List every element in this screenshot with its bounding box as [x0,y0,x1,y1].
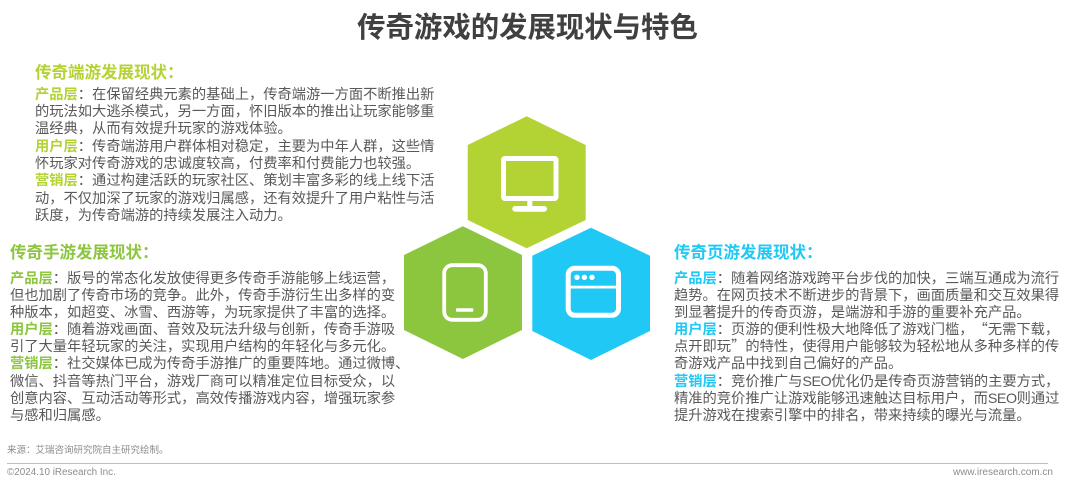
text block: mobile game details: 与感和归属感。 [10,408,110,424]
text block: PC game details: 怀玩家对传奇游戏的忠诚度较高，付费率和付费能力也较强。 [35,156,420,172]
text block: PC game details: 跃度，为传奇端游的持续发展注入动力。 [35,208,292,224]
text block: PC game details: 营销层：通过构建活跃的玩家社区、策划丰富多彩的线上线下活 [35,173,434,189]
text block: mobile game details: 微信、抖音等热门平台，游戏厂商可以精准定位目标受众，以 [10,374,395,390]
heading: PC game: 传奇端游发展现状： [35,64,184,82]
website: www.iresearch.com.cn [953,467,1053,478]
text block: mobile game details: 产品层：版号的常态化发放使得更多传奇手游能够上线运营， [10,271,395,287]
icon: monitor hexagon [468,116,586,248]
text block: PC game details: 用户层：传奇端游用户群体相对稳定，主要为中年人群，这些情 [35,139,434,155]
text block: mobile game details: 用户层：随着游戏画面、音效及玩法升级与创新，传奇手游吸 [10,322,395,338]
text block: web game details: 产品层：随着网络游戏跨平台步伐的加快，三端互通成为流行 [674,271,1059,287]
text block: mobile game details: 但也加剧了传奇市场的竞争。此外，传奇手游衍生出多样的变 [10,288,395,304]
text block: mobile game details: 创意内容、互动活动等形式，高效传播游戏内容，增强玩家参 [10,391,395,407]
heading: mobile game: 传奇手游发展现状： [10,244,158,262]
text block: web game details: 精准的竞价推广让游戏能够迅速触达目标用户，而SEO则通过 [674,391,1059,407]
icon: tablet hexagon [404,226,522,359]
icon: browser hexagon [532,228,650,360]
panel: web game status [674,244,1059,424]
text block: web game details: ” [731,335,745,356]
text block: PC game details: 的玩法如大逃杀模式，另一方面，怀旧版本的推出让玩家能够重 [35,104,434,120]
text block: web game details: 到显著提升的传奇页游，是端游和手游的重要补充产品。 [674,305,1031,321]
heading: web game: 传奇页游发展现状： [674,244,822,262]
text block: PC game details: 温经典，从而有效提升玩家的游戏体验。 [35,121,292,137]
panel: PC game status [35,64,434,224]
text block: PC game details: 产品层：在保留经典元素的基础上，传奇端游一方面不断推出新 [35,87,434,103]
text block: web game details: 奇游戏产品中找到自己偏好的产品。 [674,356,902,372]
text block: mobile game details [10,270,409,424]
text block: mobile game details: 营销层：社交媒体已成为传奇手游推广的重要阵地。通过微博、 [10,356,409,372]
title: 传奇游戏的发展现状与特色 [357,12,698,44]
text block: web game details: 点开即玩 的特性，使得用户能够较为轻松地从多种多样的传 [674,339,1059,355]
text block: PC game details [35,86,434,224]
text block: mobile game details: 种版本，如超变、冰雪、西游等，为玩家提供了丰富的选择。 [10,305,395,321]
hexagon diagram [404,116,650,360]
text block: PC game details: 动，不仅加深了玩家的游戏归属感，还有效提升了用户粘性与活 [35,191,434,207]
text block: web game details: 营销层：竞价推广与SEO优化仍是传奇页游营销的主要方式， [674,374,1059,390]
text block: web game details: 趋势。在网页技术不断进步的背景下，画面质量和交互效果得 [674,288,1059,304]
copyright: ©2024.10 iResearch Inc. [7,467,116,478]
text block: web game details: 提升游戏在搜索引擎中的排名，带来持续的曝光与流量。 [674,408,1031,424]
text block: web game details [674,270,1059,424]
panel: mobile game status [10,244,409,424]
text block: web game details: 用户层：页游的便利性极大地降低了游戏门槛， 无需下载， [674,322,1059,338]
text block: web game details: “ [974,318,988,339]
text block: mobile game details: 引了大量年轻玩家的关注，实现用户结构的年轻化与多元化。 [10,339,395,355]
source note: 来源：艾瑞咨询研究院自主研究绘制。 [7,444,169,456]
